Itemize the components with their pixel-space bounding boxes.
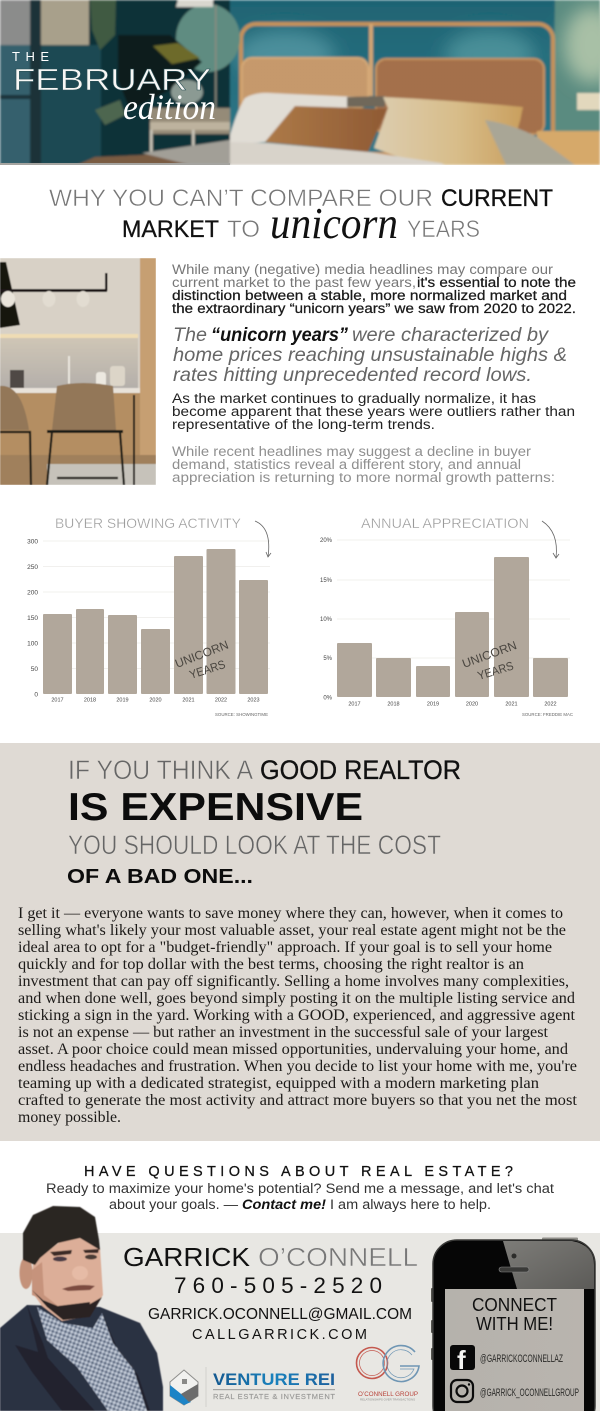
icon: facebook [450,1345,475,1370]
chart title: BUYER SHOWING ACTIVITY [55,515,242,531]
heading: realtor: IF YOU THINK A [68,755,253,785]
cta text: Ready to maximize your home's potential? Send me a message, and let's chat [46,1181,554,1196]
intro paragraph: current market to the past few years, [172,275,416,290]
intro paragraph: While many (negative) media headlines may compare our [172,262,554,277]
italic pull quote: were characterized by [352,325,550,346]
source: SOURCE: FREDDIE MAC [522,712,574,717]
body paragraph: teaming up with a dedicated strategist, equipped with a modern marketing plan [18,1075,539,1092]
main headline: MARKET [122,216,219,243]
x axis labels [348,702,557,708]
x axis labels: 2017 [348,702,361,708]
source: SOURCE: SHOWINGTIME [215,712,268,717]
logo: Venture REI: REAL ESTATE & INVESTMENT [213,1392,335,1401]
body paragraph: and when done well, goes beyond simply posting it on the multiple listing service and [18,990,575,1007]
italic pull quote: “unicorn years” [211,325,348,346]
connect heading: CONNECT [472,1295,557,1315]
body paragraph: crafted to generate the most activity and attract more buyers so that you net the most [18,1092,578,1109]
x axis labels: 2018 [387,702,400,708]
heading: realtor: OF A BAD ONE... [67,866,253,888]
y axis labels: 100 [27,640,38,648]
buyer demand paragraph: While recent headlines may suggest a decline in buyer [172,444,532,459]
buyer demand paragraph: demand, statistics reveal a different story, and annual [172,457,521,472]
body paragraph: selling what's likely your most valuable asset, your real estate agent might not be the [18,922,566,939]
main headline [49,185,553,248]
y axis labels: 150 [27,615,38,622]
panel: realtor cost [0,743,600,1141]
x axis labels: 2020 [149,698,162,704]
phone mockup [431,1238,595,1411]
y axis labels: 50 [31,666,38,673]
main headline: unicorn [270,199,398,248]
arrow [255,521,271,557]
main headline: YEARS [407,216,480,243]
normalization paragraph: become apparent that these years were outliers rather than [172,404,575,419]
intro paragraph: it's essential to note the [417,275,576,290]
cta text: about your goals. — [109,1197,239,1212]
body paragraph: asset. A poor choice could mean missed opportunities, undervaluing your home, and [18,1041,568,1058]
kitchen photo [0,258,156,485]
hero banner [0,0,600,165]
chart: annual appreciation [320,515,574,717]
cta text [46,1181,554,1212]
intro paragraph [172,262,576,316]
body paragraph [18,905,578,1126]
y axis labels: 200 [27,590,38,596]
italic pull quote: The [173,325,207,346]
bars [43,549,268,694]
cta text: Contact me! [242,1197,327,1212]
y axis labels: 20% [320,538,333,544]
buyer demand paragraph: appreciation is returning to more normal growth patterns: [172,470,555,485]
italic pull quote: home prices reaching unsustainable highs & [173,345,567,366]
x axis labels: 2023 [247,698,260,704]
logo: O'Connell Group: RELATIONSHIPS OVER TRANSACTIONS [360,1398,415,1402]
unicorn years label: UNICORN [460,638,519,671]
body paragraph: ideal area to opt for a "budget-friendly" approach. If your goal is to sell your home [18,939,552,956]
unicorn years label: YEARS [188,657,227,682]
call to action [46,1164,554,1212]
x axis labels: 2019 [427,702,439,708]
x axis labels: 2022 [215,698,227,704]
normalization paragraph: representative of the long-term trends. [172,417,435,432]
intro paragraph: distinction between a stable, more normalized market and [172,288,567,303]
phone screen [445,1289,584,1411]
heading: realtor: YOU SHOULD LOOK AT THE COST [68,830,441,860]
y axis labels: 300 [27,538,38,546]
connect heading: WITH ME! [476,1314,553,1334]
x axis labels: 2018 [84,698,96,704]
icon: instagram [451,1380,473,1402]
y axis labels [320,538,333,702]
x axis labels: 2017 [51,698,64,704]
y axis labels: 250 [27,564,38,571]
y axis labels: 10% [320,617,333,623]
arrow [542,521,559,558]
italic pull quote: rates hitting unprecedented record lows. [173,365,532,386]
y axis labels: 15% [320,578,333,584]
intro paragraph: the extraordinary “unicorn years” we saw from 2020 to 2022. [172,301,576,316]
heading: realtor: GOOD REALTOR [260,755,461,785]
normalization paragraph [172,391,575,432]
connect heading [472,1298,557,1330]
x axis labels: 2019 [116,698,129,704]
y axis labels: 5% [323,656,333,662]
italic pull quote [173,325,567,386]
x axis labels: 2020 [466,702,478,708]
buyer demand paragraph [172,444,555,485]
website: CALLGARRICK.COM [192,1327,367,1343]
y axis labels: 0 [34,692,38,698]
body paragraph: I get it — everyone wants to save money where they can, however, when it comes to [18,905,563,922]
intro text block [172,262,576,485]
icon: facebook: f [457,1345,466,1375]
main headline: WHY YOU CAN’T COMPARE OUR [49,185,433,212]
contact details [123,1242,418,1343]
cta text: I am always here to help. [330,1197,491,1212]
body paragraph: investment that can pay off significantly. Selling a home involves many complexities, [18,973,569,990]
agent portrait [0,1206,163,1411]
logo: O'Connell Group [356,1346,419,1402]
x axis labels: 2021 [182,698,195,704]
contact details: O’CONNELL [258,1242,418,1272]
body paragraph: endless headaches and frustration. When you decide to list your home with me, you're [18,1058,577,1075]
main headline: TO [227,216,260,243]
hero title: edition: edition [123,87,216,127]
contact band [0,1233,600,1411]
chart: buyer showing activity [27,515,271,717]
phone number: 760-505-2520 [174,1273,382,1298]
logo: O'Connell Group: O’CONNELL GROUP [358,1391,418,1398]
x axis labels: 2022 [544,702,557,708]
email: GARRICK.OCONNELL@GMAIL.COM [148,1306,412,1323]
x axis labels [51,698,260,704]
body paragraph: money possible. [18,1109,121,1126]
y axis labels: 0% [323,696,333,702]
bars [337,557,568,697]
logo: Venture REI [170,1367,335,1407]
body paragraph: quickly and for top dollar with the best terms, choosing the right realtor is an [18,956,524,973]
body paragraph: is not an expense — but rather an investment in the successful sale of your largest [18,1024,549,1041]
cta heading: HAVE QUESTIONS ABOUT REAL ESTATE? [84,1164,513,1180]
hero title: THE: THE [12,49,49,64]
logo: Venture REI: VENTURE REI [213,1371,335,1389]
chart title: ANNUAL APPRECIATION [361,515,529,531]
hero photo: bedroom [0,0,600,165]
heading: realtor: IS EXPENSIVE [68,786,363,829]
agent name: GARRICK [123,1242,251,1272]
y axis labels [27,538,38,698]
main headline: CURRENT [441,185,553,212]
heading: realtor [67,755,461,888]
body paragraph: sticking a sign in the yard. Working with a GOOD, experienced, and aggressive agent [18,1007,576,1024]
x axis labels: 2021 [505,702,518,708]
hero title: FEBRUARY: FEBRUARY [13,62,211,97]
unicorn years label: YEARS [476,659,515,683]
normalization paragraph: As the market continues to gradually normalize, it has [172,391,536,406]
house icon [170,1370,198,1405]
unicorn years label: UNICORN [173,638,230,671]
